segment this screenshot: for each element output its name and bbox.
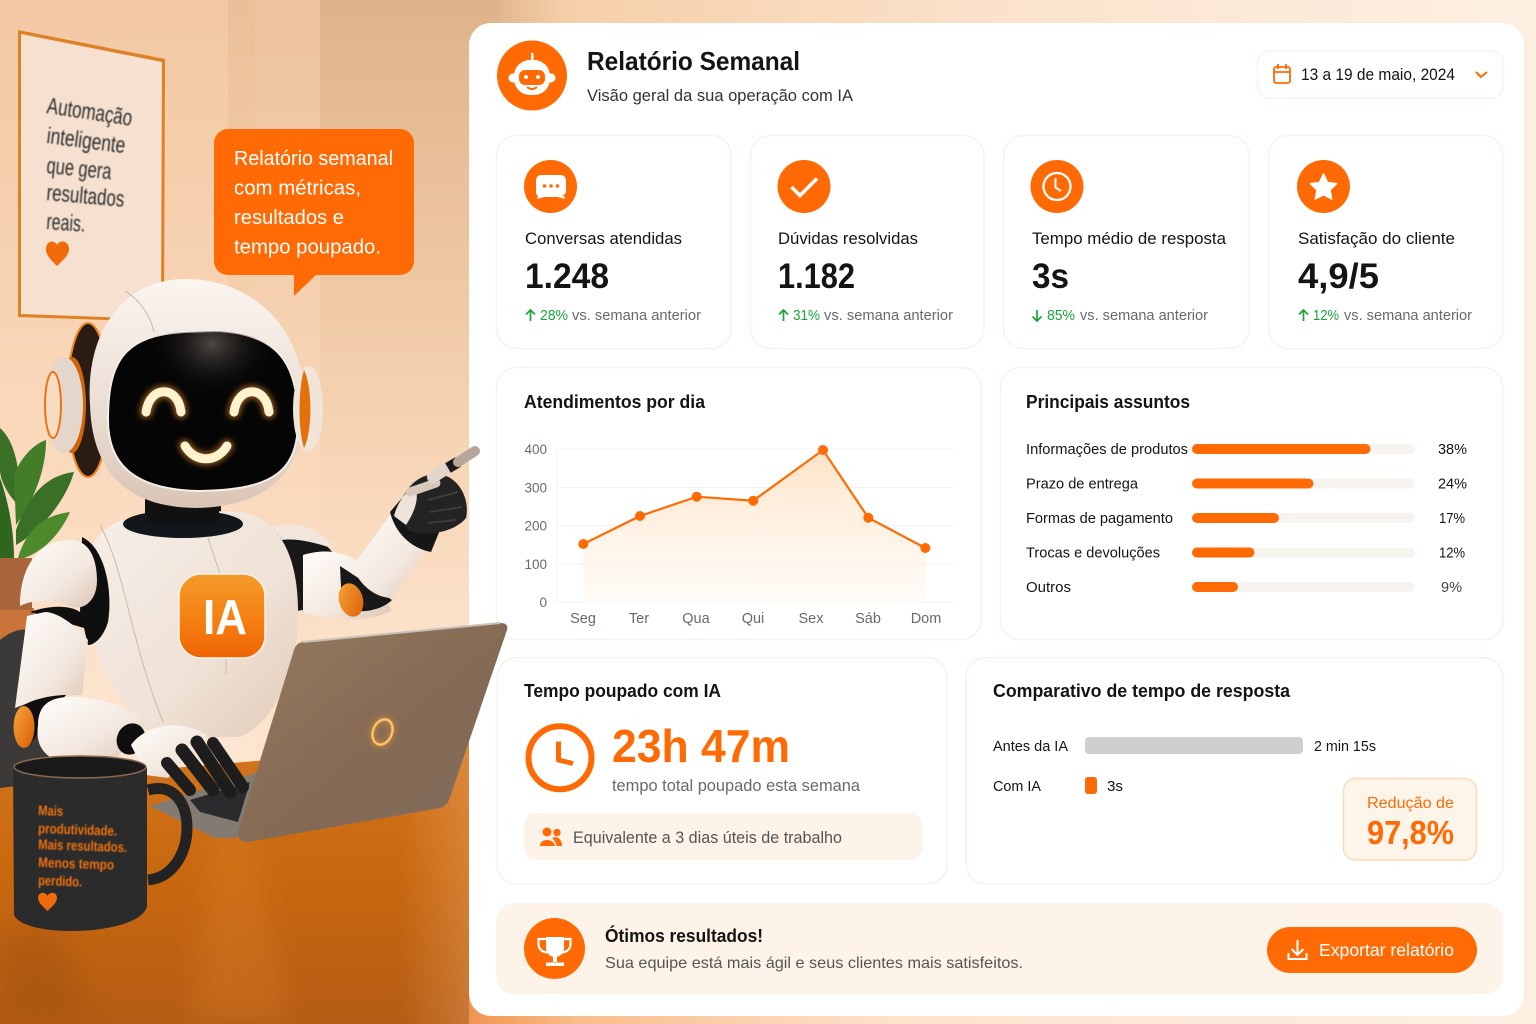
card: satisfação do cliente: 4,9/5 (1298, 257, 1379, 296)
panel: tempo poupado (497, 658, 947, 884)
card: satisfação do cliente (1268, 136, 1503, 348)
poster text: Automação (45, 92, 134, 131)
card: satisfação do cliente: vs. semana anterior (1344, 308, 1472, 324)
icon: trophy (524, 918, 585, 979)
line chart: Dom (911, 611, 941, 627)
poster text: resultados (46, 179, 126, 212)
card: tempo médio de resposta: 3s (1032, 257, 1069, 296)
speech bubble: Relatório semanal (234, 148, 393, 170)
robot pointing hand (394, 451, 475, 534)
laptop logo (369, 716, 396, 748)
robot face glow (146, 392, 269, 459)
line chart: Qui (742, 611, 764, 627)
bar: antes da IA: Antes da IA (993, 739, 1068, 755)
panel: tempo poupado: Tempo poupado com IA (524, 680, 721, 701)
line chart: 300 (524, 480, 547, 496)
poster heart (46, 242, 69, 266)
robot head (90, 279, 305, 508)
date selector (1258, 51, 1503, 98)
poster text (45, 92, 134, 237)
line chart: Qua (682, 611, 711, 627)
panel: principais assuntos: Principais assuntos (1026, 391, 1190, 412)
line chart: Sex (798, 611, 824, 627)
speech bubble: com métricas, (234, 178, 361, 200)
button: exportar relatório: Exportar relatório (1319, 940, 1454, 960)
callout: equivalente: Equivalente a 3 dias úteis de trabalho (573, 829, 842, 847)
plant (0, 428, 74, 610)
mug text: produtividade. (38, 820, 117, 839)
card: dúvidas resolvidas: vs. semana anterior (824, 308, 953, 324)
line chart: Seg (570, 611, 596, 627)
mug text: Menos tempo (38, 854, 114, 873)
panel: atendimentos por dia (496, 368, 981, 640)
card: tempo médio de resposta (1004, 136, 1249, 348)
poster text: que gera (46, 152, 113, 184)
icon: clock (528, 726, 592, 789)
subheading: Visão geral da sua operação com IA (587, 87, 853, 105)
card: satisfação do cliente: Satisfação do cliente (1298, 230, 1455, 248)
mug text (38, 802, 127, 890)
card: tempo médio de resposta: vs. semana anterior (1080, 308, 1208, 324)
speech bubble (214, 129, 414, 296)
mug text: perdido. (38, 872, 82, 890)
bar: com IA: 3s (1107, 779, 1123, 795)
card: tempo médio de resposta: Tempo médio de resposta (1032, 230, 1227, 248)
banner: ótimos resultados: Ótimos resultados! (605, 925, 763, 946)
mug text: Mais (38, 802, 64, 819)
line chart: 100 (524, 557, 547, 572)
horizontal bar chart: 24% (1438, 476, 1467, 492)
card: conversas atendidas: Conversas atendidas (525, 230, 682, 248)
speech bubble: tempo poupado. (234, 236, 381, 258)
line chart: 200 (524, 518, 547, 534)
bar: com IA (993, 777, 1123, 795)
card: dúvidas resolvidas: 1.182 (778, 257, 855, 296)
coffee mug (13, 756, 187, 931)
horizontal bar chart: Informações de produtos (1026, 442, 1188, 458)
robot hand fingers over keyboard (167, 742, 243, 792)
robot neck (145, 495, 221, 530)
panel: tempo poupado: tempo total poupado esta semana (612, 777, 861, 795)
card: dúvidas resolvidas: 31% (793, 308, 820, 324)
card: conversas atendidas: vs. semana anterior (572, 308, 701, 324)
card: conversas atendidas (496, 136, 731, 348)
horizontal bar chart: Trocas e devoluções (1026, 546, 1160, 562)
bar: com IA: Com IA (993, 779, 1041, 795)
heading: Relatório Semanal (587, 46, 800, 76)
robot left headphone (45, 357, 86, 453)
banner: ótimos resultados (496, 903, 1503, 994)
header icon: robot (497, 40, 567, 110)
horizontal bar chart: 38% (1438, 442, 1467, 458)
mug heart (38, 893, 57, 911)
button: exportar relatório (1267, 927, 1477, 973)
line chart: 400 (524, 442, 547, 457)
robot right headphone (293, 366, 323, 452)
badge: IA: IA (203, 591, 247, 645)
horizontal bar chart: 17% (1439, 511, 1465, 527)
panel: comparativo de tempo de resposta: Comparativo de tempo de resposta (993, 680, 1291, 701)
robot right arm (272, 451, 475, 620)
horizontal bar chart: Formas de pagamento (1026, 511, 1173, 527)
banner: ótimos resultados: Sua equipe está mais ágil e seus clientes mais satisfeitos. (605, 955, 1023, 972)
robot left ear ring (67, 323, 109, 477)
horizontal bar chart: 12% (1439, 546, 1465, 562)
laptop (150, 623, 507, 842)
card: tempo médio de resposta: 85% (1047, 308, 1075, 324)
robot illustration (14, 279, 475, 778)
panel: principais assuntos (1000, 368, 1503, 640)
horizontal bar chart: Outros (1026, 580, 1071, 596)
card: conversas atendidas: 1.248 (525, 257, 609, 296)
bar: antes da IA: 2 min 15s (1314, 739, 1376, 755)
line chart (524, 442, 955, 627)
callout: equivalente (524, 813, 922, 860)
panel: atendimentos por dia: Atendimentos por dia (524, 391, 706, 412)
callout: redução: 97,8% (1367, 814, 1454, 851)
decorative poster on wall (18, 30, 165, 322)
speech bubble: resultados e (234, 207, 344, 229)
line chart: Sáb (855, 611, 881, 627)
line chart: Ter (629, 611, 649, 627)
badge: IA (179, 574, 265, 658)
card: conversas atendidas: 28% (540, 308, 568, 324)
panel: comparativo de tempo de resposta (966, 658, 1503, 884)
horizontal bar chart (1026, 442, 1467, 596)
card: dúvidas resolvidas: Dúvidas resolvidas (778, 230, 918, 248)
card: satisfação do cliente: 12% (1313, 308, 1339, 324)
card: dúvidas resolvidas (750, 136, 984, 348)
bar: antes da IA (993, 737, 1376, 755)
line chart: 0 (539, 595, 547, 610)
mug text: Mais resultados. (38, 836, 127, 855)
poster text: reais. (46, 208, 86, 237)
horizontal bar chart: Prazo de entrega (1026, 476, 1139, 492)
callout: redução: Redução de (1367, 795, 1454, 812)
horizontal bar chart: 9% (1441, 580, 1462, 596)
callout: redução (1344, 778, 1476, 860)
robot left arm (14, 537, 207, 778)
poster text: inteligente (45, 122, 127, 158)
date selector: 13 a 19 de maio, 2024 (1301, 66, 1455, 84)
robot torso (85, 507, 298, 738)
panel: tempo poupado: 23h 47m (612, 720, 790, 772)
